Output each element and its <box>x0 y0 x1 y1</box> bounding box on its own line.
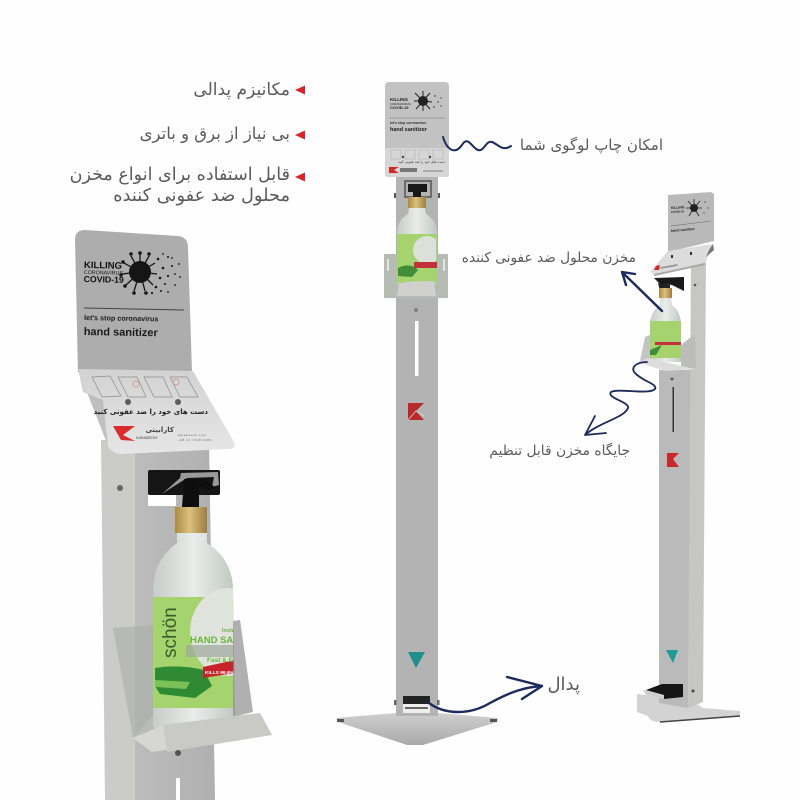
heading: killing coronavirus: CORONAVIRUS <box>84 270 123 277</box>
plate logo <box>113 426 212 442</box>
feature: all reservoir types: محلول ضد عفونی کننده <box>113 185 290 206</box>
center stand <box>336 82 498 745</box>
bottle label: schön <box>160 607 181 658</box>
center sign panel: COVID-19 <box>390 105 409 110</box>
left bottle <box>153 507 235 728</box>
arrow: to reservoir label <box>622 272 662 311</box>
center sign panel: let's stop coronavirus <box>390 121 426 125</box>
left bottle basket <box>113 620 272 756</box>
left sign panel <box>75 230 192 372</box>
center bottle holder <box>384 254 448 298</box>
center bottle <box>397 197 441 284</box>
sign text <box>84 313 159 339</box>
right stand <box>637 192 740 722</box>
arrow: wavy line to panel <box>443 137 511 150</box>
right pedal <box>643 684 683 699</box>
reservoir label: مخزن محلول ضد عفونی کننده <box>462 250 636 266</box>
center teal triangle <box>408 652 425 668</box>
bottle label <box>153 588 235 708</box>
right sign panel: hand sanitizer <box>671 227 696 233</box>
feature: pedal mechanism: مکانیزم پدالی <box>193 80 290 100</box>
center K logo <box>408 403 424 420</box>
right bottle <box>650 288 681 362</box>
center sign panel: CORONAVIRUS <box>390 102 411 106</box>
feature: no power needed: بی نیاز از برق و باتری <box>140 124 290 144</box>
right sign panel: KILLING <box>671 205 685 210</box>
holder label: جایگاه مخزن قابل تنظیم <box>489 442 630 459</box>
center sign panel: دست های خود را ضد عفونی کنید <box>398 160 445 164</box>
sign text: let's stop coronavirus <box>84 313 158 323</box>
left stand post <box>101 440 215 800</box>
feature list <box>70 80 305 206</box>
plate logo: KARABEESH <box>136 436 158 440</box>
left stand close-up <box>75 230 272 800</box>
center sign panel: hand sanitizer <box>390 127 428 133</box>
icon: small virus <box>414 91 442 111</box>
center base <box>336 713 498 745</box>
center pump <box>394 181 440 199</box>
right post <box>659 250 706 708</box>
arrow: curved line to pedal label <box>429 677 542 712</box>
divider line <box>84 308 184 310</box>
icon: virus <box>119 251 181 295</box>
heading: killing coronavirus: COVID-19 <box>84 274 124 285</box>
callout: reservoir <box>462 250 662 311</box>
bottle label: KILLS 99.9% <box>205 670 235 676</box>
plate logo: karabeesh.com <box>178 433 206 437</box>
sign text: hand sanitizer <box>84 326 159 339</box>
center pedal <box>394 696 440 713</box>
feature: all reservoir types <box>70 165 305 206</box>
left angled plate <box>78 369 235 454</box>
plate logo: +98 21 7438 3283 <box>178 438 212 442</box>
arrow: wavy line to holder label <box>585 362 655 435</box>
center sign panel: KILLING <box>390 97 408 102</box>
icon: tiny virus <box>686 199 709 216</box>
callout: logo printing <box>443 136 663 154</box>
center post <box>396 176 438 716</box>
center sign panel <box>385 82 449 177</box>
right base <box>637 694 740 722</box>
bottle label: HAND SANITIZER <box>190 635 270 646</box>
right teal triangle <box>666 650 678 663</box>
bottle label: Instant <box>222 628 240 634</box>
bottle label: Fast & Effective <box>207 657 256 664</box>
right pump <box>654 277 684 291</box>
callout: adjustable holder <box>489 362 655 459</box>
callout: pedal <box>429 674 580 712</box>
screws <box>125 399 131 405</box>
heading: killing coronavirus: KILLING <box>84 260 122 272</box>
plate instruction text: دست های خود را ضد عفونی کنید <box>94 408 208 416</box>
heading: killing coronavirus <box>84 260 124 285</box>
right tray <box>638 334 697 371</box>
right K logo <box>667 453 679 467</box>
left pump bracket and nozzle <box>148 470 220 507</box>
feature: all reservoir types: قابل استفاده برای انواع مخزن <box>70 165 290 185</box>
plate logo: کارابیتی <box>145 426 175 434</box>
pedal label: پدال <box>547 674 580 695</box>
right sign panel: COVID-19 <box>671 209 684 214</box>
logo printing label: امکان چاپ لوگوی شما <box>520 136 663 154</box>
right plate <box>650 244 714 276</box>
instruction pictograms <box>92 376 198 397</box>
right sign panel <box>668 192 714 252</box>
